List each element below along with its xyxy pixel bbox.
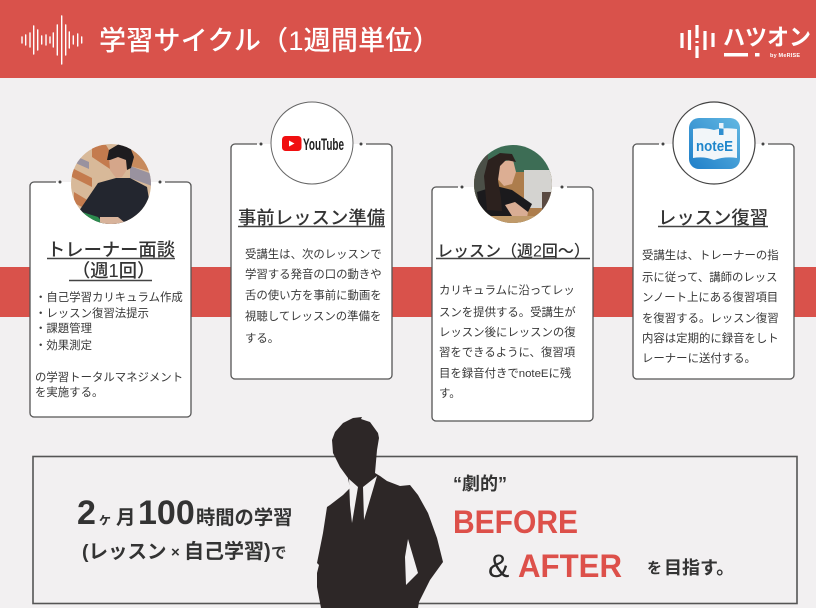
red horizontal band [0, 267, 816, 317]
text block: 示に従って、講師のレッス [642, 270, 778, 284]
goal statement left: 月 [116, 507, 136, 529]
text block: レーナーに送付する。 [642, 351, 756, 365]
text block: 習をできるように、復習項 [439, 345, 576, 359]
text block [439, 284, 576, 400]
text block: ・レッスン復習法提示 [35, 306, 149, 320]
text block: の学習トータルマネジメント [35, 370, 183, 384]
text block: を復習する。レッスン復習 [642, 311, 779, 325]
text block [35, 290, 183, 399]
icon: noteE app: noteE [696, 138, 733, 155]
heading [47, 239, 175, 281]
goal statement left: 2 [77, 494, 96, 532]
goal statement left: 時間の学習 [196, 506, 292, 529]
goal statement right: 目指す。 [664, 557, 734, 578]
goal statement left: 100 [138, 494, 195, 532]
goal statement left [77, 494, 292, 563]
text block: する。 [245, 332, 279, 345]
photo: trainer [70, 143, 152, 226]
title: 学習サイクル（1週間単位） [99, 26, 440, 56]
goal statement right: を [647, 560, 662, 577]
header banner [0, 0, 816, 78]
text block: ・自己学習カリキュラム作成 [35, 290, 183, 304]
panel: trainer interview [30, 143, 191, 417]
goal statement left: × [171, 544, 180, 561]
text block: 視聴してレッスンの準備を [245, 309, 381, 323]
text block: 目を録音付きでnoteEに残 [439, 366, 572, 380]
text block: レッスン後にレッスンの復 [439, 325, 576, 339]
goal statement left: (レッスン [82, 541, 166, 563]
goal statement right: BEFORE [453, 504, 578, 540]
text block: カリキュラムに沿ってレッ [439, 284, 575, 297]
logo: hatsuon by MeRISE [682, 24, 811, 59]
photo: lecturer [474, 145, 553, 224]
heading: レッスン復習 [658, 207, 768, 228]
text block: ・課題管理 [35, 321, 93, 335]
goal statement left: ヶ [98, 511, 112, 527]
heading: トレーナー面談 [47, 239, 175, 260]
goal statement right: “劇的” [453, 474, 507, 494]
goal statement right [453, 474, 734, 584]
logo: hatsuon by MeRISE: by MeRISE [770, 53, 800, 59]
icon: YouTube logo: YouTube [303, 135, 344, 154]
goal statement left: で [271, 545, 287, 562]
goal statement left: 自己学習) [184, 540, 271, 563]
goal statement right: AFTER [518, 548, 622, 584]
text block: す。 [439, 387, 461, 400]
text block: 舌の使い方を事前に動画を [245, 288, 382, 302]
text block: 受講生は、トレーナーの指 [642, 248, 779, 262]
icon: noteE app [673, 102, 755, 184]
heading: 事前レッスン準備 [238, 207, 385, 228]
logo: hatsuon by MeRISE: ハツオン [723, 24, 811, 50]
heading: レッスン（週2回〜） [437, 242, 590, 260]
icon: YouTube logo [271, 102, 353, 184]
panel: lesson review [633, 102, 794, 379]
text block: ンノート上にある復習項目 [642, 290, 778, 304]
panel: pre-lesson preparation [231, 102, 392, 379]
text block [245, 247, 382, 345]
panel: lesson [432, 145, 593, 421]
illustration: businessman silhouette [317, 417, 443, 608]
text block: 学習する発音の口の動きや [245, 267, 382, 281]
text block [642, 248, 779, 365]
heading: （週1回） [72, 260, 155, 281]
text block: スンを提供する。受講生が [439, 305, 576, 319]
panel: goal box [33, 456, 797, 604]
icon: sound waveform [22, 16, 82, 64]
text block: を実施する。 [35, 386, 103, 399]
text block: 内容は定期的に録音をしト [642, 331, 779, 345]
text block: ・効果測定 [35, 338, 92, 352]
goal statement right: & [488, 548, 509, 584]
text block: 受講生は、次のレッスンで [245, 247, 382, 261]
